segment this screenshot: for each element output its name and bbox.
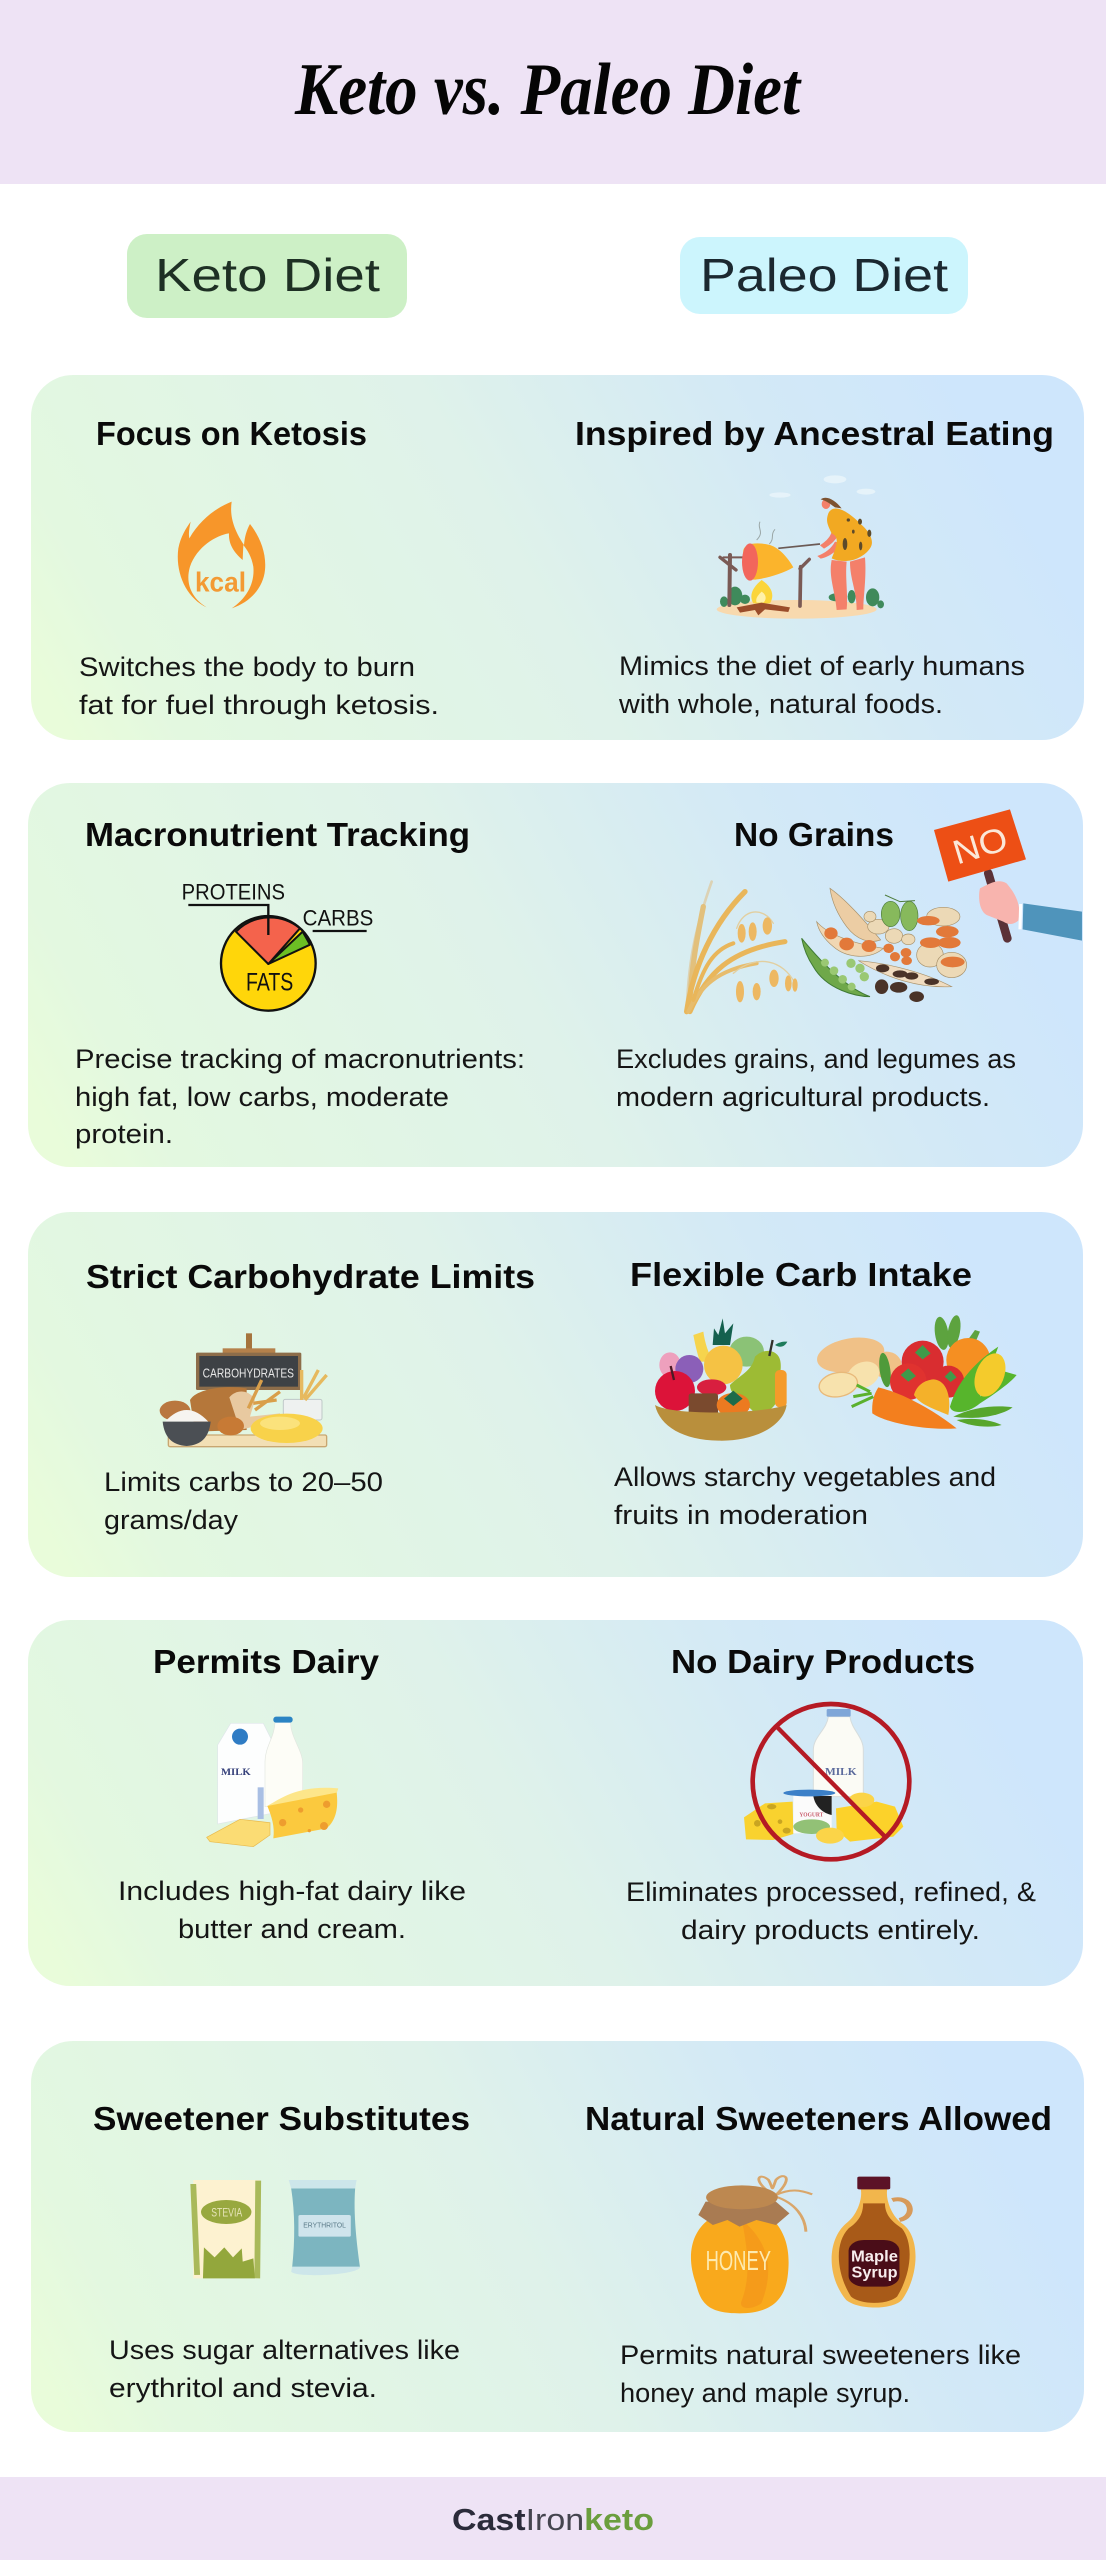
text: Eliminates processed: dairy products entirely.	[681, 1915, 980, 1945]
chart: macronutrient pie: PROTEINS	[182, 879, 285, 904]
panel: macronutrient tracking vs no grains	[28, 783, 1083, 1167]
icon: grains and legumes with NO sign: NO	[949, 820, 1012, 872]
text: Excludes grains	[616, 1044, 1016, 1112]
text: Mimics the diet	[618, 651, 1025, 719]
text: Eliminates processed: Eliminates processed, refined, &	[626, 1877, 1036, 1907]
icon: crossed-out dairy	[744, 1704, 909, 1859]
icon: crossed-out dairy: MILK	[825, 1767, 857, 1778]
text: Permits natural sweeteners: Permits natural sweeteners like	[620, 2340, 1021, 2370]
panel: ketosis vs ancestral eating	[31, 375, 1084, 740]
heading: Strict Carbohydrate Limits: Strict Carbohydrate Limits	[86, 1258, 535, 1295]
footer band	[0, 2477, 1106, 2560]
heading: Inspired by Ancestral Eating: Inspired by Ancestral Eating	[575, 415, 1054, 452]
heading: No Dairy Products: No Dairy Products	[671, 1643, 975, 1680]
text: Excludes grains: Excludes grains, and legumes as	[616, 1044, 1016, 1074]
text: Includes high-fat dairy	[118, 1876, 466, 1944]
text: Mimics the diet: Mimics the diet of early humans	[619, 651, 1025, 681]
text: Eliminates processed	[626, 1877, 1036, 1945]
icon: kcal flame	[178, 502, 265, 608]
text: Switches the body: Switches the body to burn	[79, 652, 415, 682]
heading: Macronutrient Tracking: Macronutrient Tracking	[85, 816, 470, 853]
text: Switches the body	[79, 652, 439, 720]
text: Uses sugar alternatives	[109, 2335, 460, 2403]
text: Uses sugar alternatives: Uses sugar alternatives like	[109, 2335, 460, 2365]
text: Excludes grains: modern agricultural products.	[616, 1082, 990, 1112]
icon: grains and legumes with NO sign	[687, 809, 1082, 1012]
icon: caveman roasting meat	[717, 475, 884, 619]
text: Uses sugar alternatives: erythritol and stevia.	[109, 2373, 377, 2403]
chart: macronutrient pie: FATS	[246, 969, 293, 997]
heading: Permits Dairy: Permits Dairy	[153, 1643, 380, 1680]
icon: honey jar and maple syrup: HONEY	[706, 2246, 771, 2276]
text: Limits carbs: grams/day	[104, 1505, 239, 1535]
text: Precise tracking: Precise tracking of macronutrients:	[75, 1044, 525, 1074]
icon: honey jar and maple syrup: Syrup	[851, 2265, 898, 2281]
heading: Sweetener Substitutes: Sweetener Substitutes	[93, 2100, 470, 2137]
heading: Focus on Ketosis: Focus on Ketosis	[96, 415, 367, 452]
chart: macronutrient pie	[182, 879, 373, 1011]
column label: Keto Diet: Keto Diet	[155, 249, 380, 301]
heading: Natural Sweeteners Allowed: Natural Sweeteners Allowed	[585, 2100, 1052, 2137]
panel: carbohydrate limits vs flexible carbs	[28, 1212, 1083, 1577]
icon: carbohydrates board and foods: CARBOHYDRATES	[203, 1366, 294, 1380]
text: Mimics the diet: with whole, natural foods.	[618, 689, 943, 719]
column label: Keto Diet	[127, 234, 407, 318]
text: Precise tracking: high fat, low carbs, moderate	[75, 1082, 449, 1112]
icon: stevia and erythritol packets: ERYTHRITOL	[303, 2221, 346, 2229]
text: Switches the body: fat for fuel through ketosis.	[79, 690, 439, 720]
chart: macronutrient pie: CARBS	[303, 906, 373, 931]
panel: permits dairy vs no dairy	[28, 1620, 1083, 1986]
text: Limits carbs: Limits carbs to 20–50	[104, 1467, 383, 1497]
text: Allows starchy vegetables	[614, 1462, 996, 1530]
icon: fruit basket and vegetables	[655, 1314, 1017, 1441]
text: Precise tracking	[75, 1044, 525, 1149]
column label: Paleo Diet: Paleo Diet	[700, 249, 948, 301]
heading: No Grains: No Grains	[734, 816, 894, 853]
text: Permits natural sweeteners: honey and maple syrup.	[620, 2378, 910, 2408]
icon: milk and cheese: MILK	[221, 1767, 251, 1777]
icon: honey jar and maple syrup: Maple	[851, 2249, 898, 2266]
title: Keto vs. Paleo Diet	[294, 49, 802, 131]
text: Precise tracking: protein.	[75, 1119, 173, 1149]
column label: Paleo Diet	[680, 237, 968, 314]
icon: stevia and erythritol packets: STEVIA	[211, 2206, 242, 2220]
header band	[0, 0, 1106, 184]
text: Includes high-fat dairy: butter and cream.	[178, 1914, 406, 1944]
icon: crossed-out dairy: YOGURT	[799, 1812, 824, 1819]
icon: honey jar and maple syrup	[691, 2176, 916, 2313]
footer logo: CastIronketo	[452, 2502, 654, 2537]
text: Allows starchy vegetables: fruits in moderation	[614, 1500, 868, 1530]
icon: milk and cheese	[207, 1717, 338, 1847]
text: Permits natural sweeteners	[620, 2340, 1021, 2408]
text: Allows starchy vegetables: Allows starchy vegetables and	[614, 1462, 996, 1492]
text: Limits carbs	[104, 1467, 383, 1535]
icon: kcal flame: kcal	[195, 567, 246, 598]
text: Includes high-fat dairy: Includes high-fat dairy like	[118, 1876, 466, 1906]
icon: stevia and erythritol packets	[193, 2180, 360, 2278]
panel: sweetener substitutes vs natural sweeteners	[31, 2041, 1084, 2432]
icon: carbohydrates board and foods	[160, 1333, 327, 1447]
heading: Flexible Carb Intake: Flexible Carb Intake	[630, 1256, 972, 1293]
